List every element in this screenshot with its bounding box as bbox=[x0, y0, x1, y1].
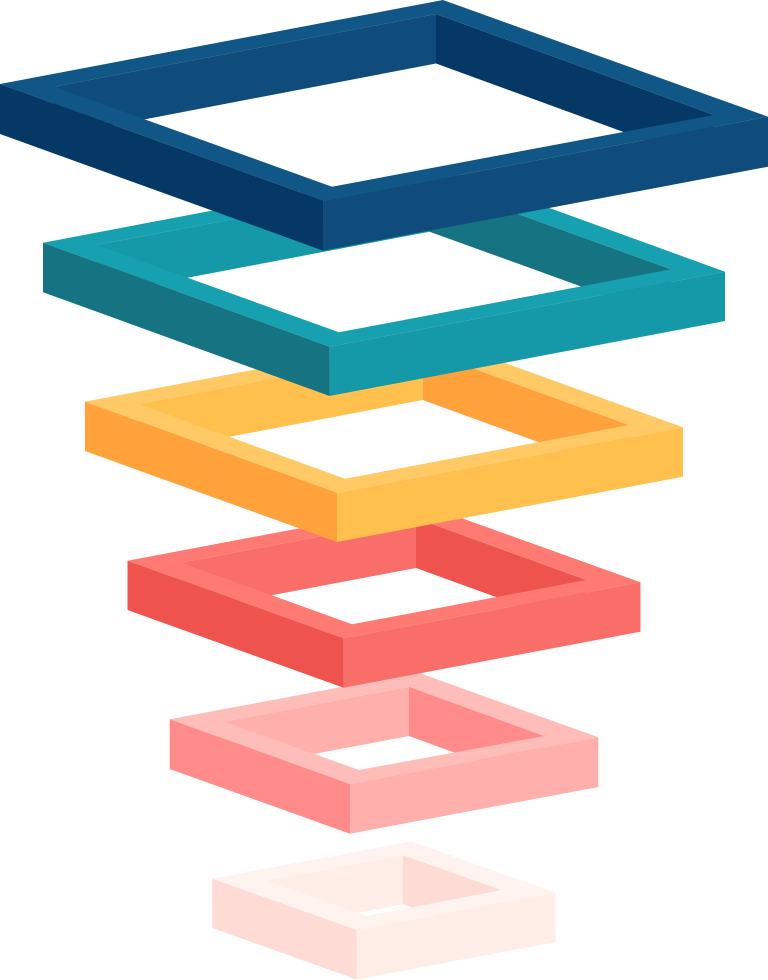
back-left inner wall bbox=[139, 350, 423, 454]
frame 1: navy (top) bbox=[0, 0, 768, 251]
back-right inner wall bbox=[403, 855, 502, 939]
outer left wall bbox=[0, 84, 323, 251]
back-left inner wall bbox=[266, 855, 403, 930]
top face bbox=[0, 0, 768, 201]
back-right inner wall bbox=[436, 14, 714, 165]
frame 6: blush (bottom) bbox=[212, 841, 556, 980]
back-right inner wall bbox=[430, 182, 671, 319]
back-right inner wall bbox=[416, 518, 586, 630]
outer left wall bbox=[170, 719, 350, 834]
frame 2: teal bbox=[43, 168, 725, 396]
top face bbox=[85, 336, 683, 493]
back-left inner wall bbox=[224, 687, 409, 771]
outer right wall bbox=[330, 272, 725, 396]
back-left inner wall bbox=[96, 182, 430, 295]
outer right wall bbox=[337, 427, 683, 542]
outer left wall bbox=[212, 879, 357, 980]
frame 4: red bbox=[128, 505, 640, 688]
outer right wall bbox=[323, 117, 768, 251]
outer right wall bbox=[344, 582, 640, 688]
frame 5: pink bbox=[170, 673, 598, 834]
outer right wall bbox=[350, 737, 598, 834]
back-right inner wall bbox=[409, 687, 544, 785]
outer right wall bbox=[357, 893, 556, 980]
frame 3: yellow bbox=[85, 336, 683, 542]
back-left inner wall bbox=[54, 14, 436, 137]
top face bbox=[128, 505, 640, 638]
outer left wall bbox=[43, 243, 330, 396]
outer left wall bbox=[128, 561, 344, 688]
top face bbox=[212, 841, 556, 930]
top face bbox=[170, 673, 598, 784]
outer left wall bbox=[85, 402, 337, 542]
back-right inner wall bbox=[423, 350, 629, 475]
top face bbox=[43, 168, 725, 347]
back-left inner wall bbox=[181, 518, 416, 612]
